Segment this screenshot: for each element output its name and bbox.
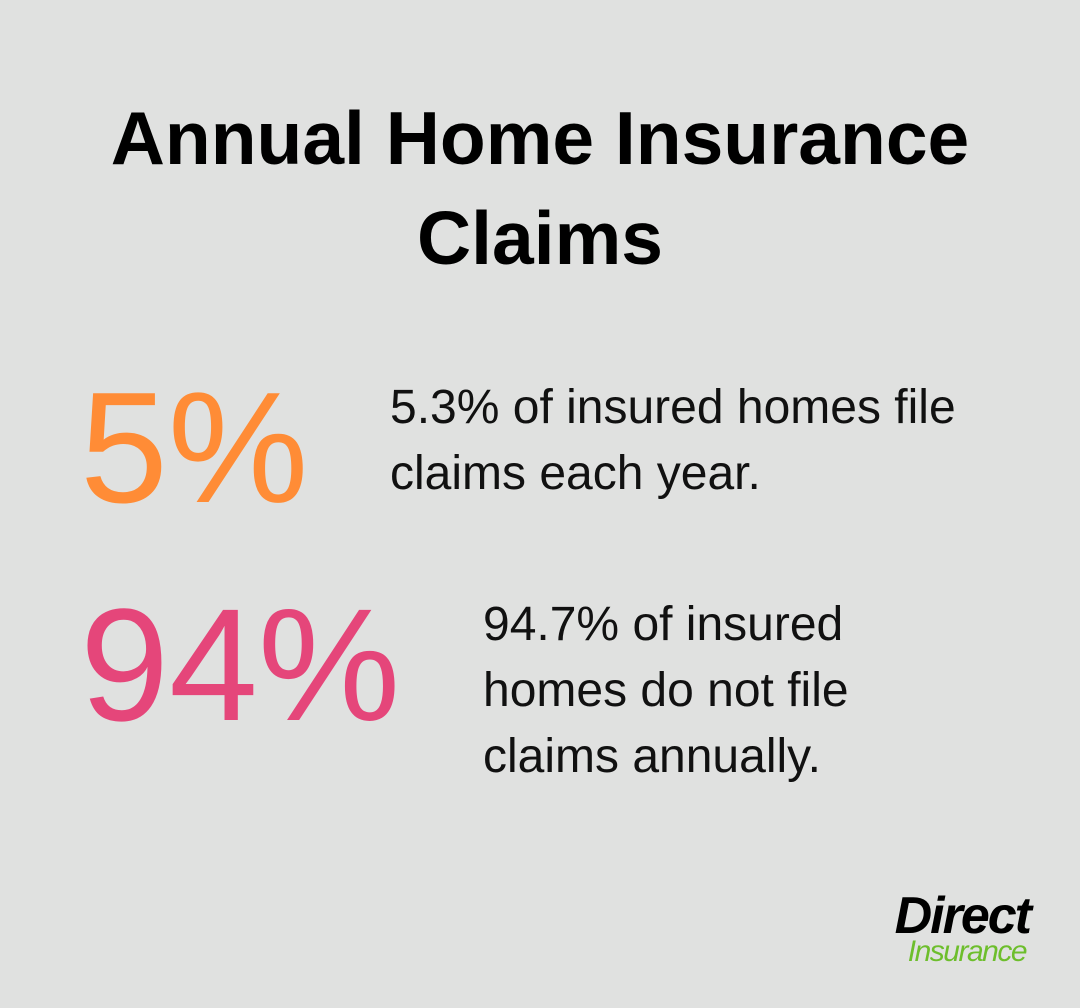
stat: 94%: 94% xyxy=(80,575,400,754)
logo: Direct xyxy=(895,887,1030,945)
text: 94.7%: claims annually. xyxy=(483,730,821,783)
text: 5.3% xyxy=(390,381,956,500)
text: 94.7%: 94.7% of insured xyxy=(483,598,843,651)
title xyxy=(111,96,969,280)
logo xyxy=(895,887,1034,968)
stat: 5%: 5% xyxy=(80,360,308,536)
text: 5.3%: claims each year. xyxy=(390,447,761,500)
title: Annual Home Insurance xyxy=(111,96,969,180)
text: 94.7% xyxy=(483,598,849,783)
title: Claims xyxy=(417,196,663,280)
text: 5.3%: 5.3% of insured homes file xyxy=(390,381,956,434)
logo: Insurance xyxy=(908,935,1026,968)
text: 94.7%: homes do not file xyxy=(483,664,849,717)
